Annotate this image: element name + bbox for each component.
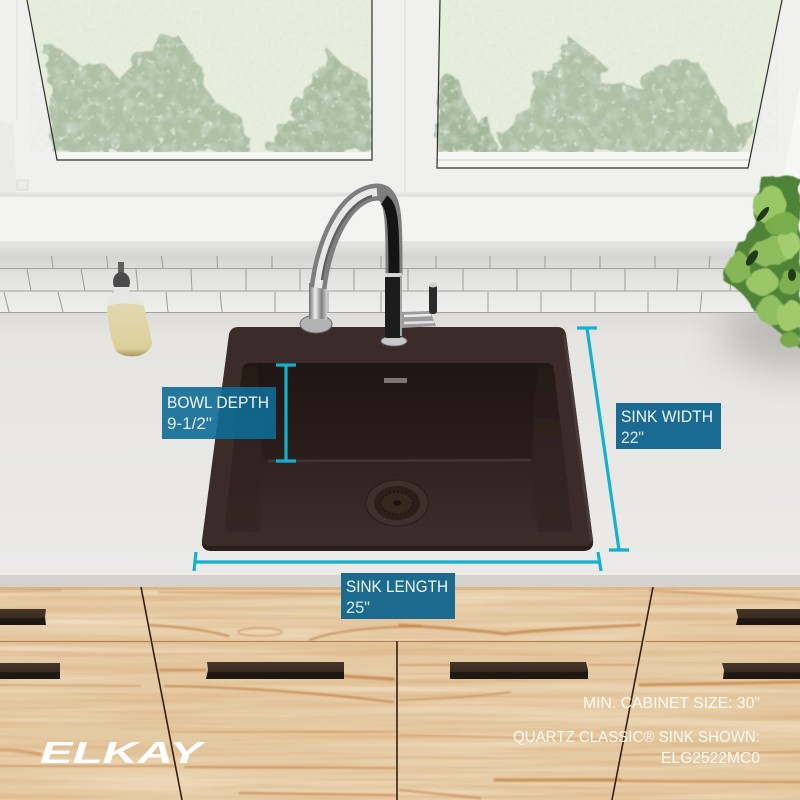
sink length label: SINK LENGTH [346,577,448,596]
drawer seams [0,640,800,642]
bowl depth label: BOWL DEPTH [167,393,269,412]
left shrubs [44,32,371,152]
cabinet door gaps [141,587,653,800]
bowl depth label: 9-1/2" [167,414,212,433]
right shrubs [438,36,752,152]
sink length label [341,573,455,619]
wood cabinets [0,587,800,800]
sink width label: 22" [621,428,644,447]
sink width marker [577,328,629,550]
window wall and frame [0,0,800,240]
sink rim [202,327,593,551]
bowl depth label [162,387,276,439]
sink logo plate [384,378,407,383]
gooseneck spout [318,192,394,288]
model note [513,729,760,767]
faucet lever handle [402,311,436,328]
sink bowl [220,360,580,536]
cabinet handles [0,609,800,679]
bowl left wall [233,439,261,531]
model note: ELG2522MC0 [661,750,760,767]
bowl depth marker [276,365,296,461]
right window pane with garden view [437,0,782,168]
bowl right wall [533,391,564,532]
window sill [0,197,800,256]
dimension: sink length [194,552,601,619]
quartz countertop [0,300,800,587]
minimum cabinet size note: MIN. CABINET SIZE: 30" [583,695,760,712]
sink width label: SINK WIDTH [621,407,713,426]
potted plant leaves [723,178,800,348]
dimension: sink width [577,328,721,550]
soap bottle [107,262,152,356]
Elkay logo: ELKAY [40,735,207,770]
subway tile backsplash [0,255,800,313]
left window pane with garden view [27,0,372,160]
kitchen faucet [300,192,437,346]
model note: QUARTZ CLASSIC® SINK SHOWN: [513,729,760,746]
wood grain streaks [0,590,800,798]
sink [202,327,593,551]
sink width label [616,403,721,449]
sink length marker [194,552,601,571]
dimension: bowl depth [162,365,296,461]
faucet base plates [381,336,407,346]
sink length label: 25" [346,598,370,617]
drain [366,480,428,526]
faucet body [385,276,401,338]
